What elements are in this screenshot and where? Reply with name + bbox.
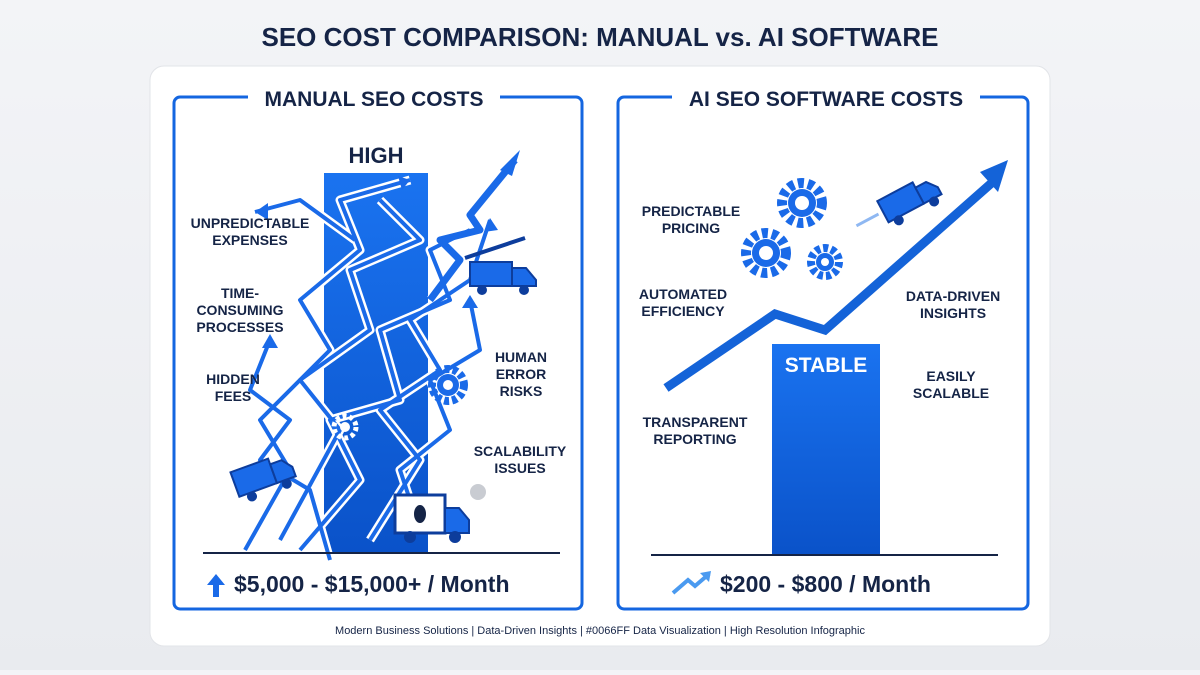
labels: ai benefits: DATA-DRIVEN: [906, 288, 1000, 304]
labels: ai benefits: EFFICIENCY: [641, 303, 725, 319]
heading: manual: MANUAL SEO COSTS: [265, 88, 483, 111]
labels: manual drawbacks: HIDDEN: [206, 371, 260, 387]
labels: manual drawbacks: [191, 215, 567, 476]
icon: bug truck: [395, 484, 486, 543]
trend arrow: [666, 160, 1008, 388]
labels: manual drawbacks: RISKS: [500, 383, 542, 399]
icon: gear (human error): [432, 369, 464, 401]
labels: ai benefits: EASILY: [926, 368, 976, 384]
labels: manual drawbacks: HUMAN: [495, 349, 547, 365]
panel: manual seo costs: [174, 88, 582, 609]
bar: high: HIGH: [348, 143, 404, 168]
icon: truck with ladder: [465, 238, 536, 295]
labels: ai benefits: AUTOMATED: [639, 286, 727, 302]
labels: manual drawbacks: TIME-: [221, 285, 259, 301]
labels: ai benefits: SCALABLE: [913, 385, 989, 401]
labels: manual drawbacks: ERROR: [496, 366, 546, 382]
card: [150, 66, 1050, 646]
icon: gear center: [334, 416, 356, 438]
labels: ai benefits: [639, 203, 1000, 447]
title: SEO COST COMPARISON: MANUAL vs. AI SOFTWARE: [261, 22, 939, 52]
heading: ai: AI SEO SOFTWARE COSTS: [689, 88, 963, 111]
arrowheads: [255, 150, 520, 348]
labels: manual drawbacks: FEES: [215, 388, 251, 404]
icon: delivery truck: [851, 173, 945, 243]
labels: ai benefits: REPORTING: [653, 431, 737, 447]
labels: ai benefits: PRICING: [662, 220, 720, 236]
cost: ai: $200 - $800 / Month: [720, 571, 931, 597]
labels: manual drawbacks: SCALABILITY: [474, 443, 567, 459]
panel: ai seo software costs: [618, 88, 1028, 609]
labels: manual drawbacks: EXPENSES: [212, 232, 288, 248]
bar: stable: [772, 344, 880, 555]
baseline: [651, 554, 998, 556]
icon: crashed truck: [230, 452, 299, 505]
labels: ai benefits: TRANSPARENT: [643, 414, 748, 430]
chaotic arrows: [245, 160, 515, 560]
bar: stable: STABLE: [785, 354, 867, 377]
labels: ai benefits: PREDICTABLE: [642, 203, 740, 219]
labels: manual drawbacks: ISSUES: [494, 460, 546, 476]
icon: gears: [746, 183, 839, 276]
footer: Modern Business Solutions | Data-Driven Insights | #0066FF Data Visualization | High Resolution Infographic: [335, 625, 865, 637]
bar: high: [324, 143, 428, 553]
labels: ai benefits: INSIGHTS: [920, 305, 986, 321]
labels: manual drawbacks: UNPREDICTABLE: [191, 215, 309, 231]
cost: manual: $5,000 - $15,000+ / Month: [234, 571, 510, 597]
labels: manual drawbacks: PROCESSES: [196, 319, 284, 335]
baseline: [203, 552, 560, 554]
labels: manual drawbacks: CONSUMING: [196, 302, 284, 318]
